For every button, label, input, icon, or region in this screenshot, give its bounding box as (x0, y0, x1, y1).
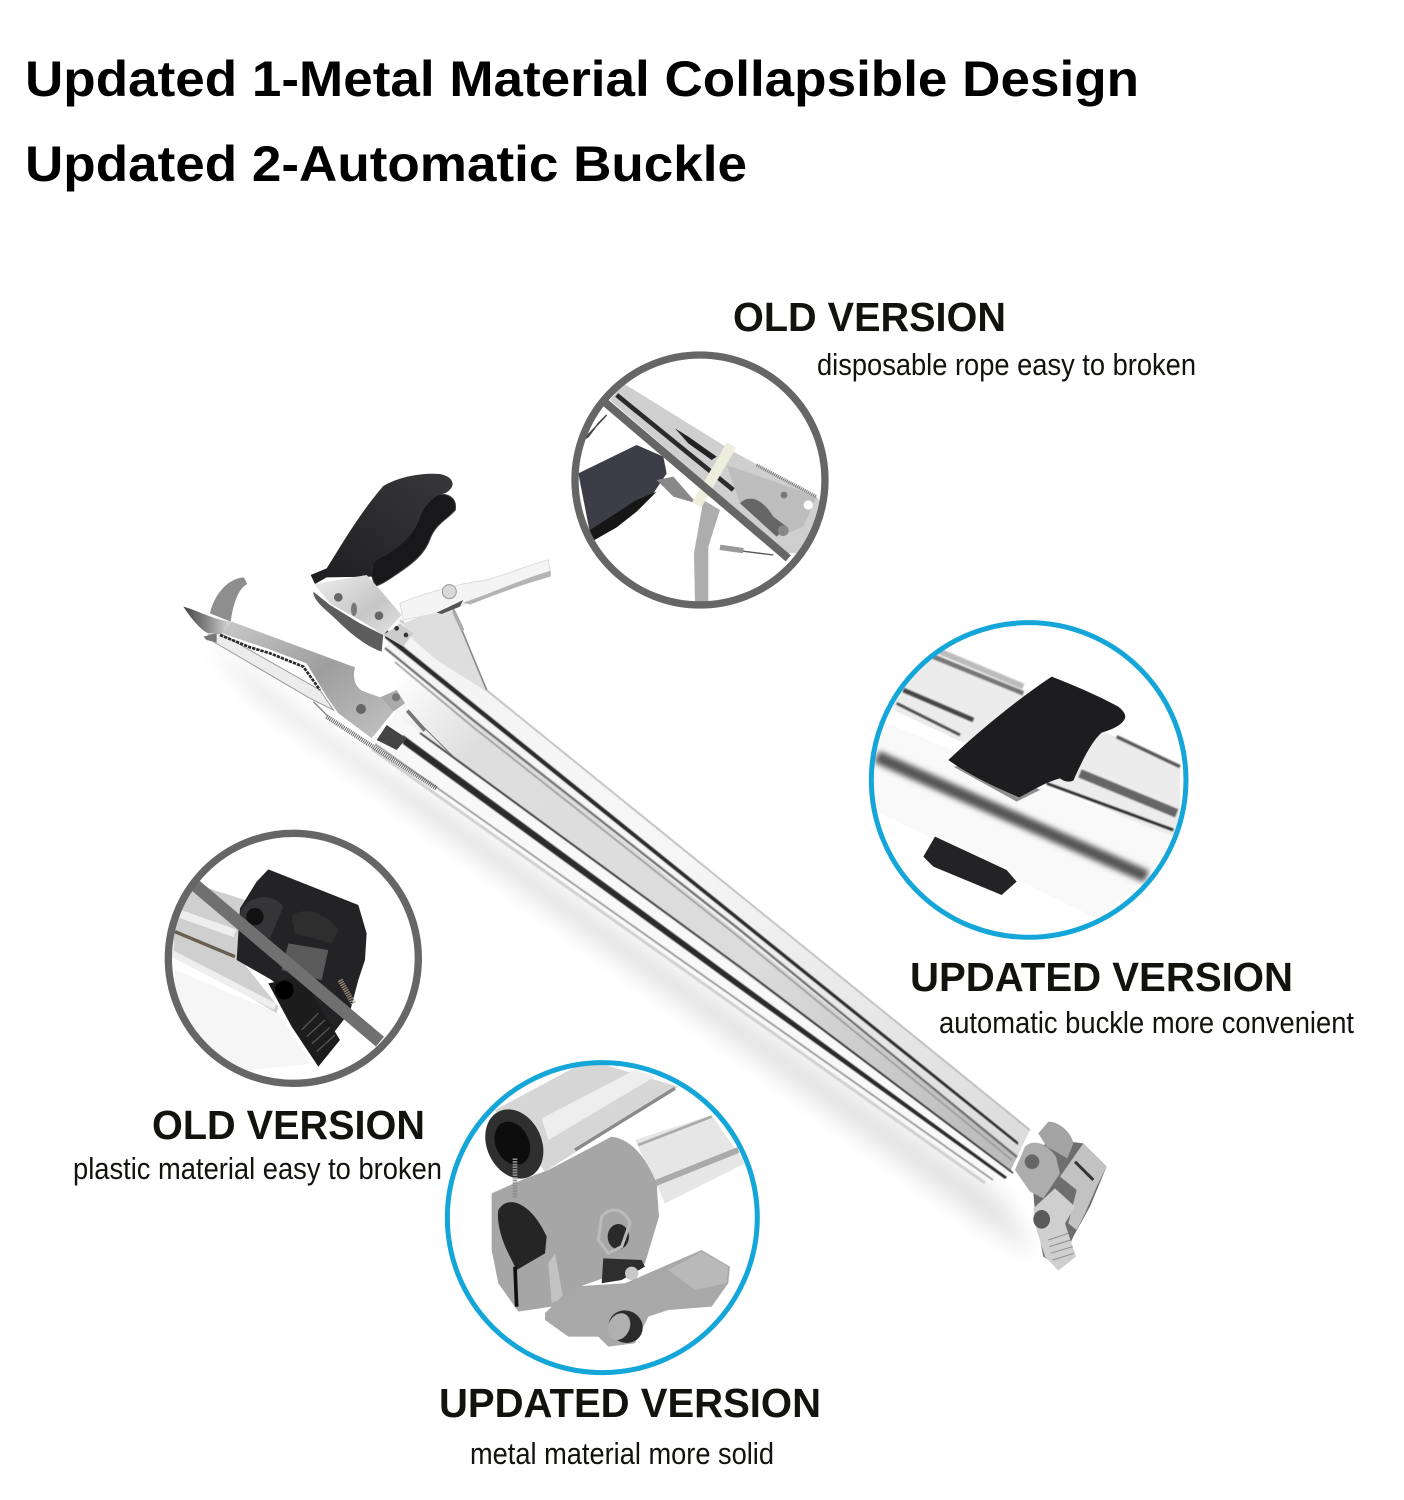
caption: automatic buckle: automatic buckle more convenient (939, 1005, 1354, 1040)
title line 2: Updated 2-Automatic Buckle (25, 136, 747, 192)
upper jaw with black grip (311, 474, 551, 692)
callout: updated automatic buckle (871, 623, 1354, 1040)
foot hinge and lever (1015, 1122, 1107, 1271)
product: collapsible reacher tool (183, 474, 1107, 1271)
caption: disposable rope: disposable rope easy to broken (817, 347, 1196, 382)
callout: old version rope (575, 294, 1196, 605)
tool cast shadow (205, 640, 1035, 1255)
detail circle: disposable rope crossed out (575, 355, 825, 605)
caption: plastic material: plastic material easy to broken (73, 1151, 442, 1186)
heading: updated version bottom: UPDATED VERSION (439, 1380, 821, 1426)
callout: updated metal hinge (439, 1060, 821, 1471)
lower jaw with hook and spring (183, 577, 453, 788)
caption: metal material: metal material more solid (470, 1436, 774, 1471)
heading: updated version right: UPDATED VERSION (910, 954, 1293, 1000)
callout: old plastic hinge (73, 833, 442, 1186)
detail circle: metal hinge (447, 1060, 757, 1373)
long metal rods (372, 620, 1030, 1183)
title line 1: Updated 1-Metal Material Collapsible Design (25, 51, 1139, 107)
detail circle: plastic hinge crossed out (168, 833, 418, 1083)
heading: old version top: OLD VERSION (733, 294, 1006, 340)
detail circle: automatic buckle (871, 623, 1186, 937)
heading: old version left: OLD VERSION (152, 1102, 425, 1148)
